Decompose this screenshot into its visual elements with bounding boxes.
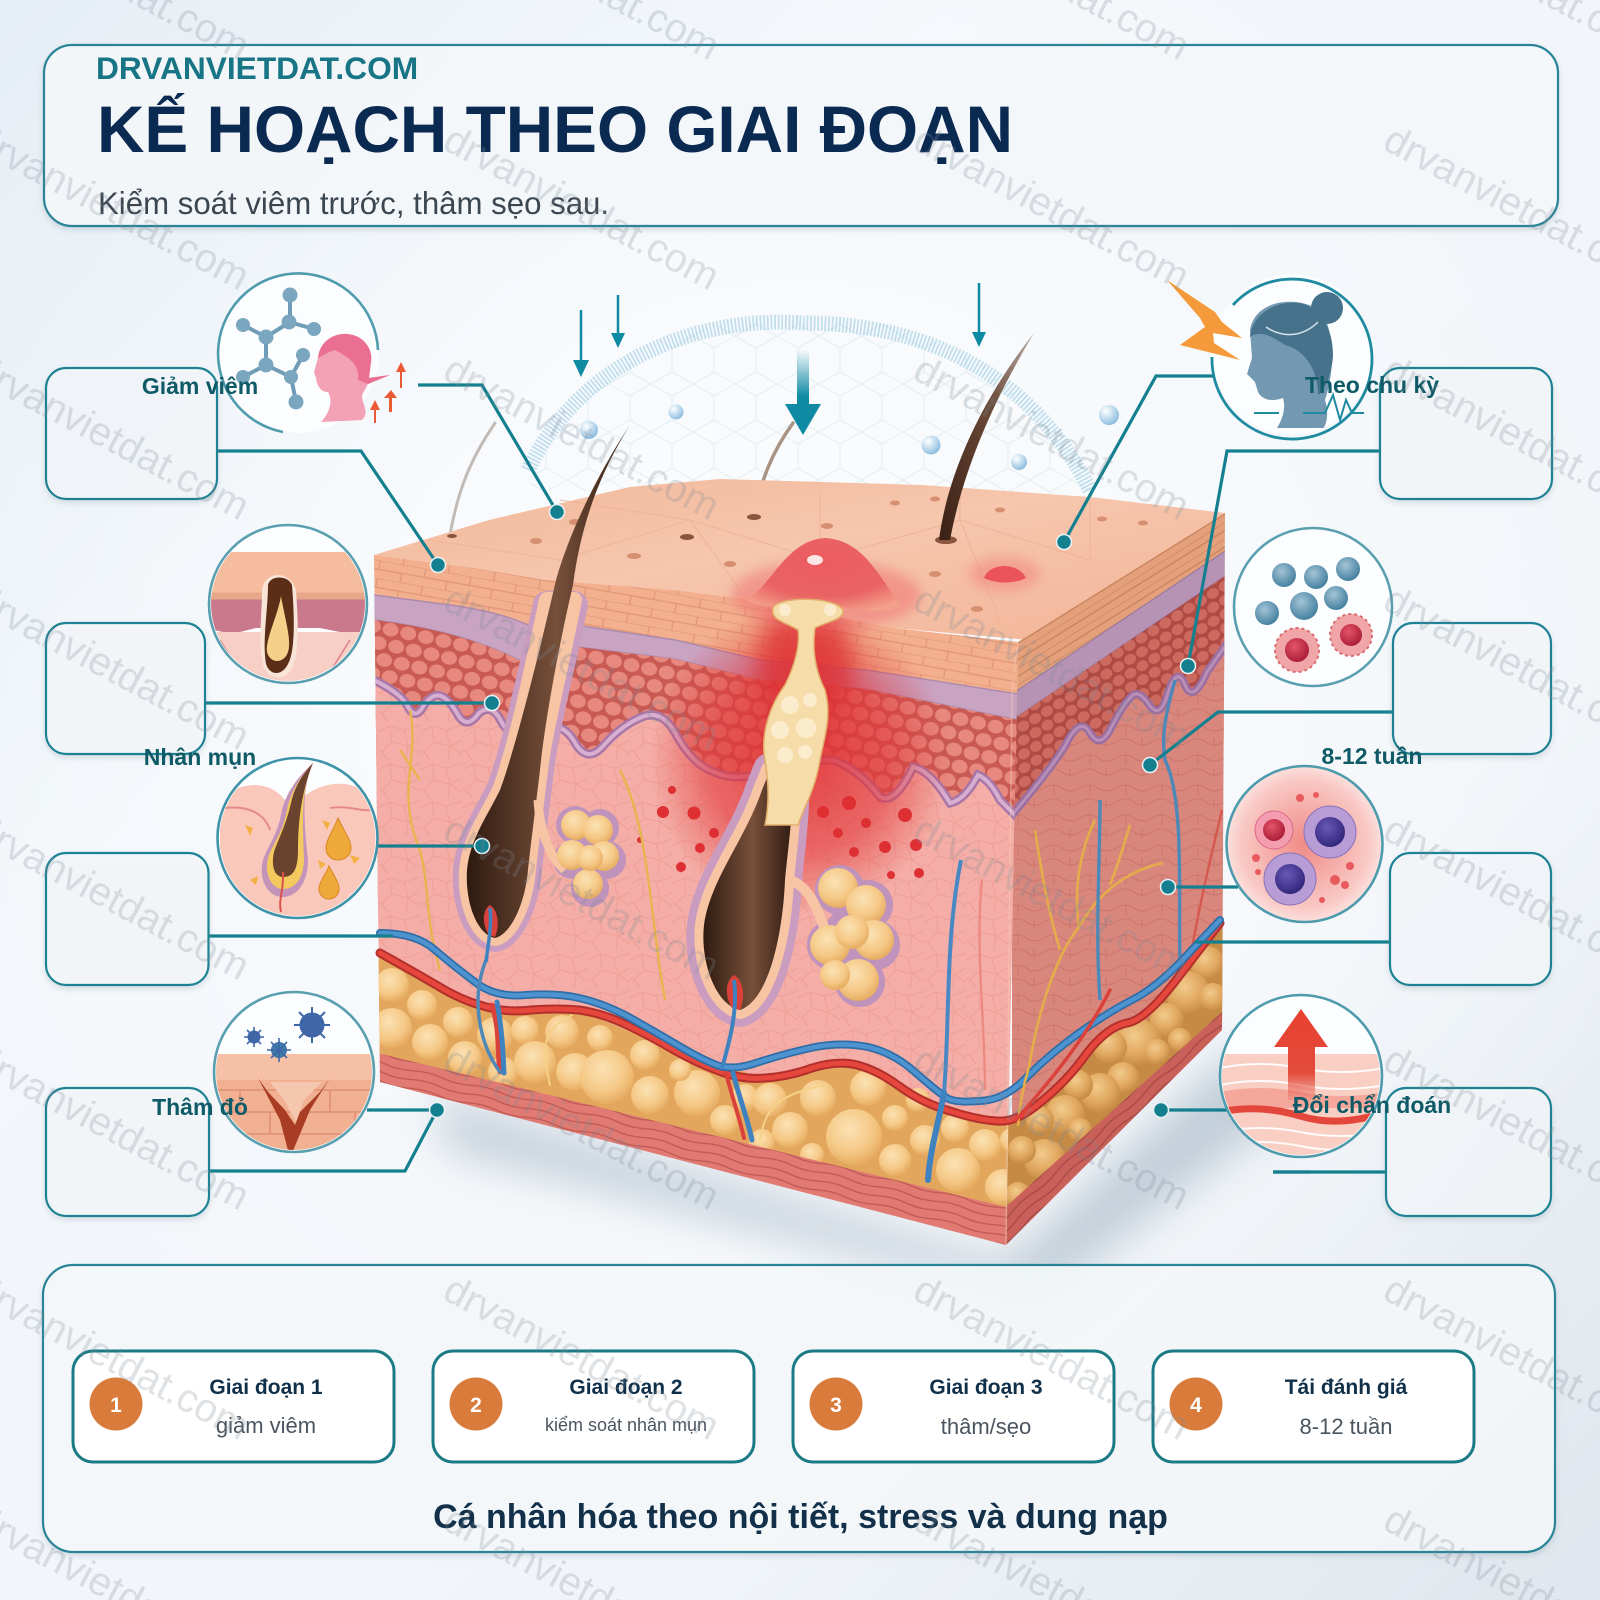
sebaceous gland 1 xyxy=(538,800,626,907)
subtitle: Kiểm soát viêm trước, thâm sẹo sau. xyxy=(98,186,609,221)
step card 1 xyxy=(73,1351,394,1462)
icon circle: inflamed cells xyxy=(1226,766,1382,922)
step card 1: giảm viêm xyxy=(216,1413,316,1438)
block floor shadow xyxy=(430,1045,1300,1300)
sebaceous gland 2 xyxy=(790,865,900,1007)
watermark: drvanvietdat.com xyxy=(437,807,726,989)
connector dots xyxy=(430,504,1196,1118)
site name: DRVANVIETDAT.COM xyxy=(96,50,418,86)
footer note: Cá nhân hóa theo nội tiết, stress và dung nạp xyxy=(433,1498,1168,1536)
label: 8-12 tuần: 8-12 tuần xyxy=(1322,743,1422,769)
callout box left 4 xyxy=(46,1088,209,1216)
connector lines xyxy=(205,376,1393,1172)
lilac band xyxy=(374,595,1018,720)
right dermis xyxy=(1012,651,1224,1114)
inflammation dots xyxy=(637,786,924,879)
icon: arrow small 1 xyxy=(573,310,589,377)
front vertical edge xyxy=(1006,642,1018,1245)
epidermis xyxy=(374,555,1018,729)
callout box right 2 xyxy=(1393,623,1551,754)
icon circle: hair follicle and oil xyxy=(218,758,378,920)
step card 2: kiểm soát nhân mụn xyxy=(545,1415,707,1435)
watermark: drvanvietdat.com xyxy=(907,807,1196,989)
fat layer xyxy=(374,945,1018,1215)
step card 4 xyxy=(1153,1351,1474,1462)
step card 2: 2 xyxy=(470,1394,482,1417)
pus column xyxy=(764,599,843,825)
watermark: drvanvietdat.com xyxy=(437,117,726,299)
skin block illustration xyxy=(360,333,1240,1255)
icon: arrow small 3 xyxy=(972,283,986,347)
right spinous layer xyxy=(1012,574,1228,860)
connector stub over circle xyxy=(1273,1170,1310,1174)
step card 4: 8-12 tuần xyxy=(1300,1414,1392,1439)
wavy basement membrane xyxy=(374,680,1018,818)
label: Theo chu kỳ: Theo chu kỳ xyxy=(1305,372,1439,398)
icon: big arrow down xyxy=(785,350,821,435)
step card 4: 4 xyxy=(1190,1394,1202,1417)
step card 2 xyxy=(433,1351,754,1462)
step card 3: thâm/sẹo xyxy=(941,1414,1031,1439)
icon circle: immune cells xyxy=(1234,528,1392,686)
pimple dome xyxy=(745,538,902,611)
left face layers xyxy=(360,540,1040,1250)
step card 4: Tái đánh giá xyxy=(1285,1376,1408,1399)
small pimple xyxy=(968,557,1040,591)
follicle 1 with hair xyxy=(467,425,630,962)
right epidermis xyxy=(1016,513,1225,740)
right muscle layer xyxy=(1006,1012,1222,1245)
callout box left 3 xyxy=(46,853,208,985)
label: Đổi chẩn đoán: Đổi chẩn đoán xyxy=(1293,1092,1451,1118)
right lilac band xyxy=(1012,549,1228,720)
watermark: drvanvietdat.com xyxy=(907,1037,1196,1219)
right fat layer xyxy=(1006,925,1225,1210)
muscle layer xyxy=(374,1052,1018,1250)
bottom panel xyxy=(43,1265,1555,1552)
watermark: drvanvietdat.com xyxy=(437,347,726,529)
right face layers xyxy=(1006,513,1225,1245)
blood vessels xyxy=(380,920,1220,1180)
nerves in dermis xyxy=(400,710,665,1000)
step card 1: Giai đoạn 1 xyxy=(209,1376,323,1399)
watermark: drvanvietdat.com xyxy=(907,117,1196,299)
callout box left 1 xyxy=(46,368,217,499)
pores on top surface xyxy=(530,496,1148,612)
icon circle: rising arrow from skin xyxy=(1220,995,1385,1159)
label: Thâm đỏ: Thâm đỏ xyxy=(152,1094,248,1120)
callout box right 4 xyxy=(1386,1088,1551,1216)
label: Nhân mụn: Nhân mụn xyxy=(144,744,256,770)
dermis xyxy=(374,680,1018,1135)
watermark: drvanvietdat.com xyxy=(437,1037,726,1219)
step card 1: 1 xyxy=(110,1394,122,1417)
callout box right 3 xyxy=(1390,853,1551,985)
top surface xyxy=(374,479,1225,640)
follicle 2 with pimple xyxy=(703,538,921,1068)
large hair right xyxy=(939,333,1034,540)
icon circle: bacteria and scar xyxy=(214,992,376,1158)
thin hairs behind xyxy=(450,423,793,537)
viruses xyxy=(244,1007,330,1062)
spinous cell layer xyxy=(374,620,1018,900)
step card 3: Giai đoạn 3 xyxy=(929,1376,1043,1399)
bubbles xyxy=(580,404,1119,470)
icon circle: comedone follicle xyxy=(205,525,375,692)
protective dome with arrows and bubbles xyxy=(520,283,1119,500)
step card 3 xyxy=(793,1351,1114,1462)
watermark: drvanvietdat.com xyxy=(907,1267,1196,1449)
watermark: drvanvietdat.com xyxy=(437,1267,726,1449)
step card 3: 3 xyxy=(830,1394,842,1417)
watermark: drvanvietdat.com xyxy=(907,347,1196,529)
icon circle: stress head with lightning xyxy=(1167,274,1372,439)
main title: KẾ HOẠCH THEO GIAI ĐOẠN xyxy=(97,93,1013,166)
watermark: drvanvietdat.com xyxy=(437,577,726,759)
header panel xyxy=(44,45,1558,226)
step card 2: Giai đoạn 2 xyxy=(569,1376,683,1399)
callout box right 1 xyxy=(1380,368,1552,499)
callout box left 2 xyxy=(46,623,205,754)
inflammation zone xyxy=(657,621,942,908)
watermark: drvanvietdat.com xyxy=(907,577,1196,759)
icon: arrow small 2 xyxy=(611,295,625,348)
label: Giảm viêm: Giảm viêm xyxy=(142,373,258,399)
icon circle: molecule and head xyxy=(218,273,406,433)
right nerves and veins xyxy=(1029,680,1222,1067)
